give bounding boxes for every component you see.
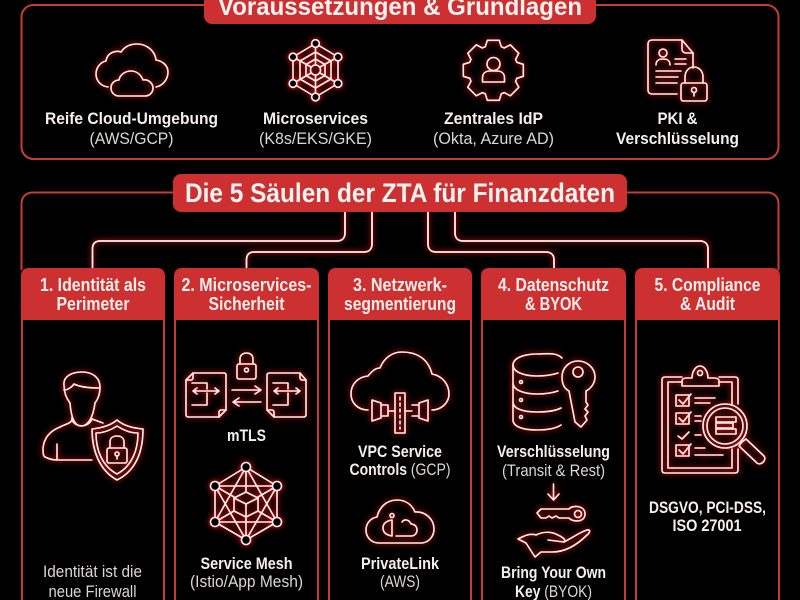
pillar header 2: Sicherheit bbox=[208, 294, 285, 314]
icon: person with shield bbox=[43, 372, 143, 480]
text: DSGVO, PCI-DSS, ISO 27001: DSGVO, PCI-DSS, bbox=[649, 498, 766, 517]
text: PKI & Verschlüsselung: Verschlüsselung bbox=[616, 129, 739, 148]
text: Microservices: (K8s/EKS/GKE) bbox=[259, 129, 372, 148]
arrow: connector microservices to IdP bbox=[353, 69, 453, 71]
pillar header 4: & BYOK bbox=[525, 294, 582, 314]
text: PrivateLink (AWS): (AWS) bbox=[380, 572, 420, 591]
panel: pillar 5 Compliance bbox=[635, 268, 780, 600]
text: Zentrales IdP: Zentrales IdP bbox=[444, 109, 543, 128]
text: PrivateLink (AWS): PrivateLink bbox=[361, 554, 439, 573]
panel frame: 5 Säulen bbox=[22, 192, 778, 270]
text: Identität ist die neue Firewall bbox=[43, 562, 142, 600]
text: PrivateLink (AWS) bbox=[361, 554, 439, 591]
text: DSGVO, PCI-DSS, ISO 27001: ISO 27001 bbox=[672, 516, 742, 535]
pillar header 1: 1. Identität als bbox=[40, 275, 146, 295]
pillar header 5: & Audit bbox=[680, 294, 735, 314]
panel: pillar 2 Microservices bbox=[174, 268, 319, 600]
text: Verschlüsselung (Transit & Rest): Verschlüsselung bbox=[497, 442, 610, 461]
text: Reife Cloud-Umgebung: Reife Cloud-Umgebung bbox=[45, 109, 218, 128]
pillar header 5: 5. Compliance bbox=[654, 275, 760, 295]
icon: database with key bbox=[513, 354, 595, 430]
pillar header 2: 2. Microservices- bbox=[182, 275, 312, 295]
pillar header 3: segmentierung bbox=[344, 294, 456, 314]
pillar header 5 bbox=[635, 268, 780, 320]
arrow: connector to pillar 3 bbox=[398, 212, 400, 268]
icon: key on hand bbox=[518, 506, 590, 557]
arrow: connector to pillar 2 bbox=[246, 212, 372, 268]
icon: private link cloud bbox=[366, 500, 434, 543]
pillar header 1 bbox=[21, 268, 165, 320]
text: Identität ist die neue Firewall: Identität ist die bbox=[43, 562, 142, 581]
text: Service Mesh: (Istio/App Mesh) bbox=[190, 572, 303, 591]
icon: microservices web bbox=[289, 40, 342, 101]
text: VPC Service Controls (GCP) bbox=[350, 442, 450, 479]
panel: Voraussetzungen & Grundlagen bbox=[22, 0, 778, 159]
text: DSGVO, PCI-DSS, ISO 27001 bbox=[649, 498, 766, 535]
text: Zentrales IdP: (Okta, Azure AD) bbox=[433, 129, 554, 148]
pillar header 3 bbox=[328, 268, 472, 320]
text: mTLS: mTLS bbox=[227, 426, 266, 445]
text: VPC Service Controls (GCP): VPC Service bbox=[358, 442, 442, 461]
arrow: connector to pillar 4 bbox=[428, 212, 554, 268]
icon: service mesh bbox=[210, 462, 282, 544]
text: Reife Cloud-Umgebung bbox=[45, 109, 218, 148]
arrow: connector to pillar 5 bbox=[455, 212, 708, 268]
text: Reife Cloud-Umgebung: (AWS/GCP) bbox=[90, 129, 174, 148]
icon: clipboard with magnifier bbox=[662, 366, 765, 473]
icon: certificate with lock bbox=[648, 40, 707, 101]
text: Service Mesh bbox=[190, 554, 303, 591]
pillar header 3: 3. Netzwerk- bbox=[353, 275, 447, 295]
panel: pillar 4 Datenschutz bbox=[481, 268, 626, 600]
text: Microservices: Microservices bbox=[263, 109, 368, 128]
icon: gear with person bbox=[463, 40, 523, 100]
pillar header 4 bbox=[481, 268, 626, 320]
text: Zentrales IdP bbox=[433, 109, 554, 148]
text: PKI & Verschlüsselung bbox=[616, 109, 739, 148]
text: Bring Your Own Key (BYOK): Bring Your Own bbox=[501, 563, 606, 582]
icon: mTLS documents and lock bbox=[186, 353, 306, 417]
panel: pillar 3 Netzwerksegmentierung bbox=[328, 268, 472, 600]
panel: pillar 1 Identität bbox=[21, 268, 165, 600]
text: Microservices bbox=[259, 109, 372, 148]
icon: cloud with gateway bbox=[351, 352, 449, 433]
pillar header 1: Perimeter bbox=[56, 294, 130, 314]
text: Verschlüsselung (Transit & Rest) bbox=[497, 442, 610, 480]
arrow: connector to pillar 1 bbox=[92, 212, 345, 268]
pillar header 2 bbox=[174, 268, 319, 320]
heading: Die 5 Säulen der ZTA für Finanzdaten: Die 5 Säulen der ZTA für Finanzdaten bbox=[185, 178, 615, 208]
icon: clouds bbox=[96, 44, 168, 96]
text: PKI & Verschlüsselung: PKI & bbox=[658, 109, 698, 128]
arrow: connector cloud to microservices bbox=[177, 69, 277, 71]
text: Service Mesh: Service Mesh bbox=[200, 554, 292, 573]
arrow: connector IdP to PKI bbox=[535, 69, 636, 71]
text: Bring Your Own Key (BYOK) bbox=[501, 563, 606, 600]
text: VPC Service Controls (GCP): Controls (GCP) bbox=[350, 460, 450, 479]
text: Verschlüsselung (Transit & Rest): (Transit & Rest) bbox=[502, 461, 605, 480]
pillar header 4: 4. Datenschutz bbox=[498, 275, 609, 295]
arrow: down to BYOK bbox=[548, 484, 559, 500]
